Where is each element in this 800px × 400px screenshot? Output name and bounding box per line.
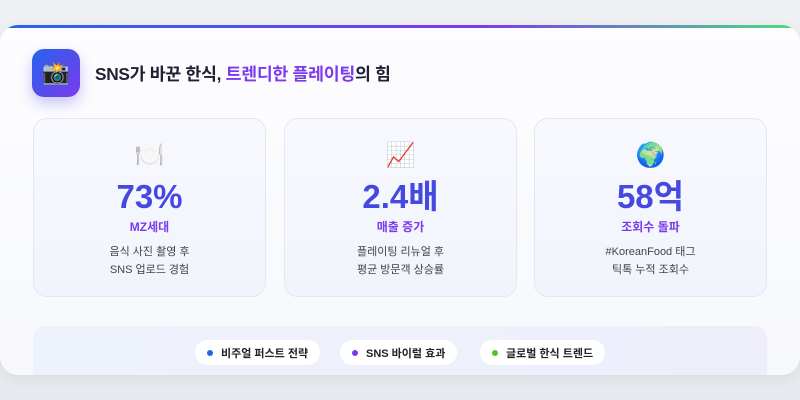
panel: stat 73%: [33, 118, 266, 297]
panel: tags: [33, 326, 767, 386]
tag: global: [480, 340, 605, 365]
panel: stat 2.4배: 평균 방문객 상승률: [357, 264, 444, 276]
panel: stat 58억: [534, 118, 767, 297]
icon: camera: [32, 49, 80, 97]
panel: stat 58억: 58억: [617, 178, 684, 215]
panel: stat 58억: 조회수 돌파: [621, 220, 680, 234]
panel: stat 73%: SNS 업로드 경험: [110, 264, 189, 276]
panel: stat 58억: #KoreanFood 태그: [606, 246, 695, 258]
panel: stat 2.4배: [284, 118, 517, 297]
panel: stat 58억: 🌍: [636, 142, 665, 169]
panel: stat 73%: 73%: [116, 178, 183, 215]
title: SNS가 바꾼 한식, 트렌디한 플레이팅의 힘: [95, 64, 391, 84]
tag: global: 글로벌 한식 트렌드: [506, 348, 593, 360]
panel: stat 73%: 음식 사진 촬영 후: [109, 246, 190, 258]
panel: stat 58억: 틱톡 누적 조회수: [612, 264, 689, 276]
tag: sns viral: SNS 바이럴 효과: [366, 348, 445, 360]
panel: stat 2.4배: 2.4배: [362, 178, 439, 215]
panel: stat 2.4배: 매출 증가: [377, 220, 424, 234]
panel: stat 2.4배: 플레이팅 리뉴얼 후: [357, 246, 444, 258]
icon: camera: 📸: [42, 60, 70, 85]
tag: visual first: [195, 340, 320, 365]
tag: sns viral: [340, 340, 457, 365]
panel: stat 73%: 🍽️: [135, 142, 164, 169]
panel: stat 73%: MZ세대: [130, 220, 169, 234]
tag: visual first: 비주얼 퍼스트 전략: [221, 348, 308, 360]
panel: stat 2.4배: 📈: [386, 142, 415, 169]
